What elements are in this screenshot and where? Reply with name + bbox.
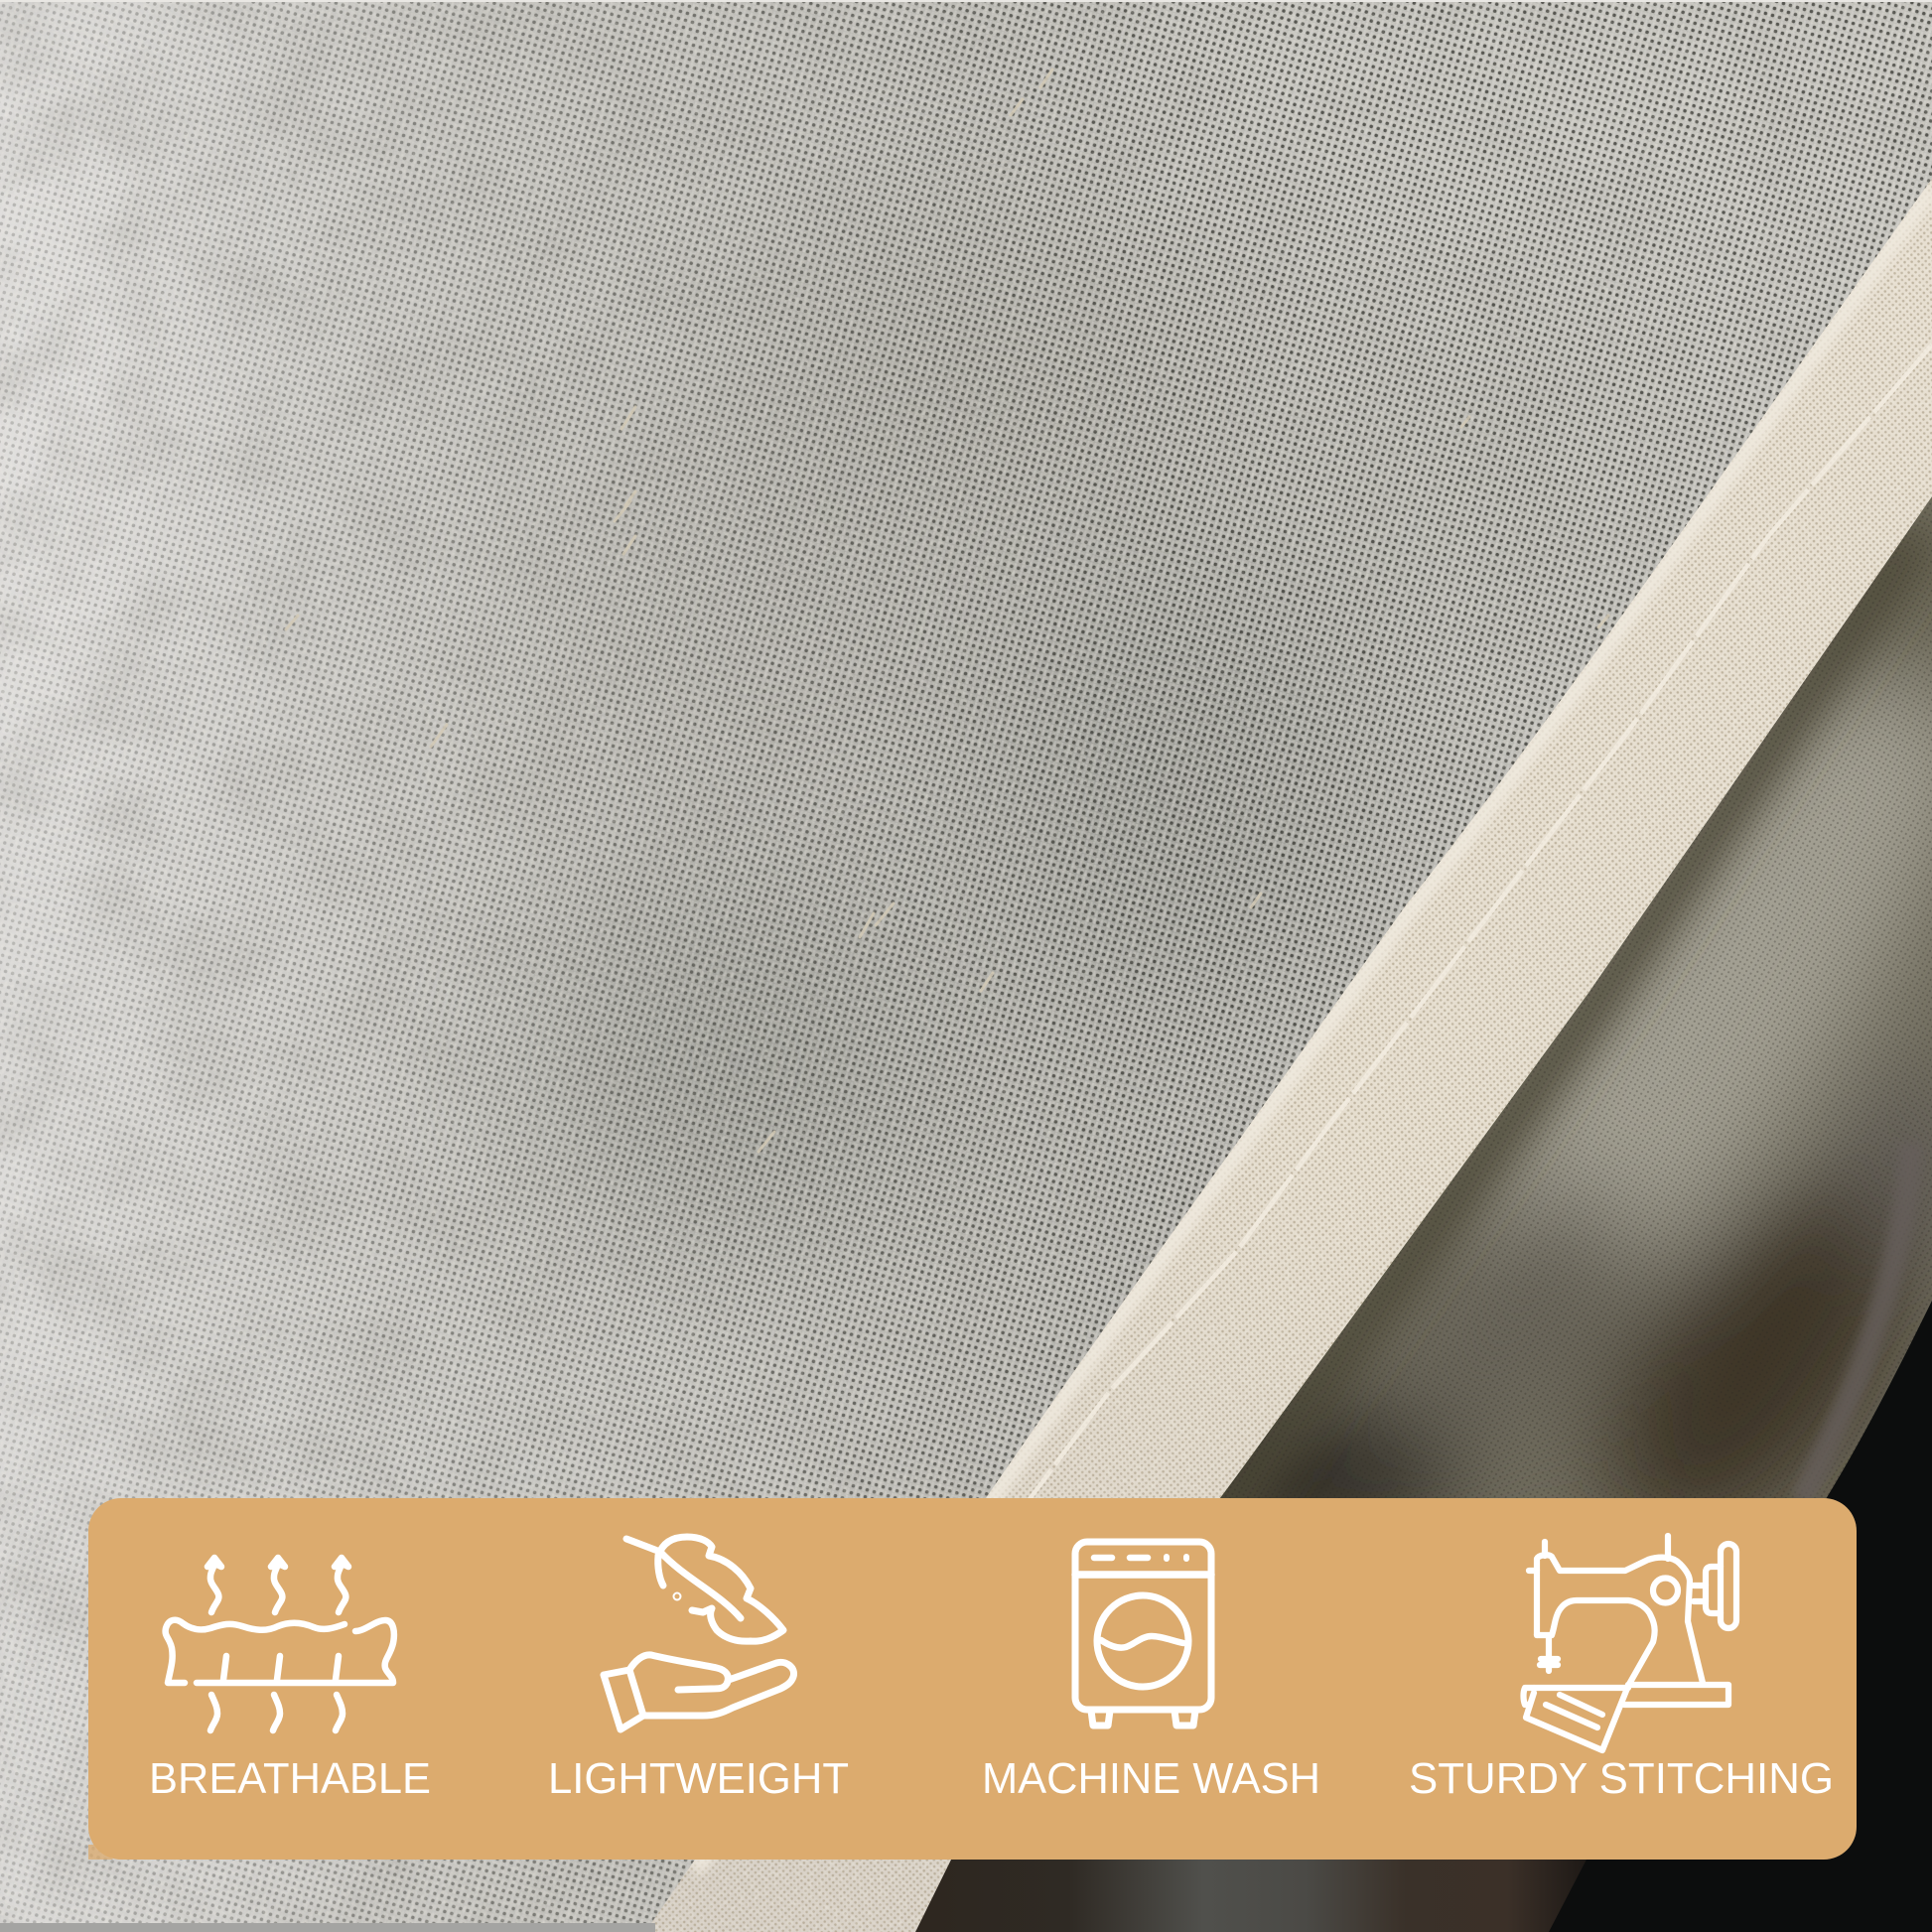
feature: breathable [149,1558,431,1803]
background: dark void at bottom right [1549,1301,1932,1932]
background: top pale line [0,0,1932,2]
background: bottom scan strip [0,1923,655,1932]
background: shaded inner fabric below the hem [894,477,1932,1932]
icon: feather over hand [604,1537,794,1729]
feature: machine wash [982,1542,1320,1803]
label: sturdy stitching: STURDY STITCHING [1409,1754,1834,1803]
panel background [88,1498,1857,1860]
icon: washing machine [1075,1542,1211,1725]
label: machine wash: MACHINE WASH [982,1754,1320,1803]
feature: lightweight [548,1537,849,1803]
icon: sewing machine [1523,1536,1736,1750]
icon: breathable fabric [166,1558,394,1730]
panel: feature bar [88,1498,1857,1860]
background: cream hem with stitch line [596,149,1932,1932]
label: breathable: BREATHABLE [149,1754,431,1803]
feature: sturdy stitching [1409,1536,1834,1803]
corner artifact [88,1845,113,1860]
label: lightweight: LIGHTWEIGHT [548,1754,849,1803]
